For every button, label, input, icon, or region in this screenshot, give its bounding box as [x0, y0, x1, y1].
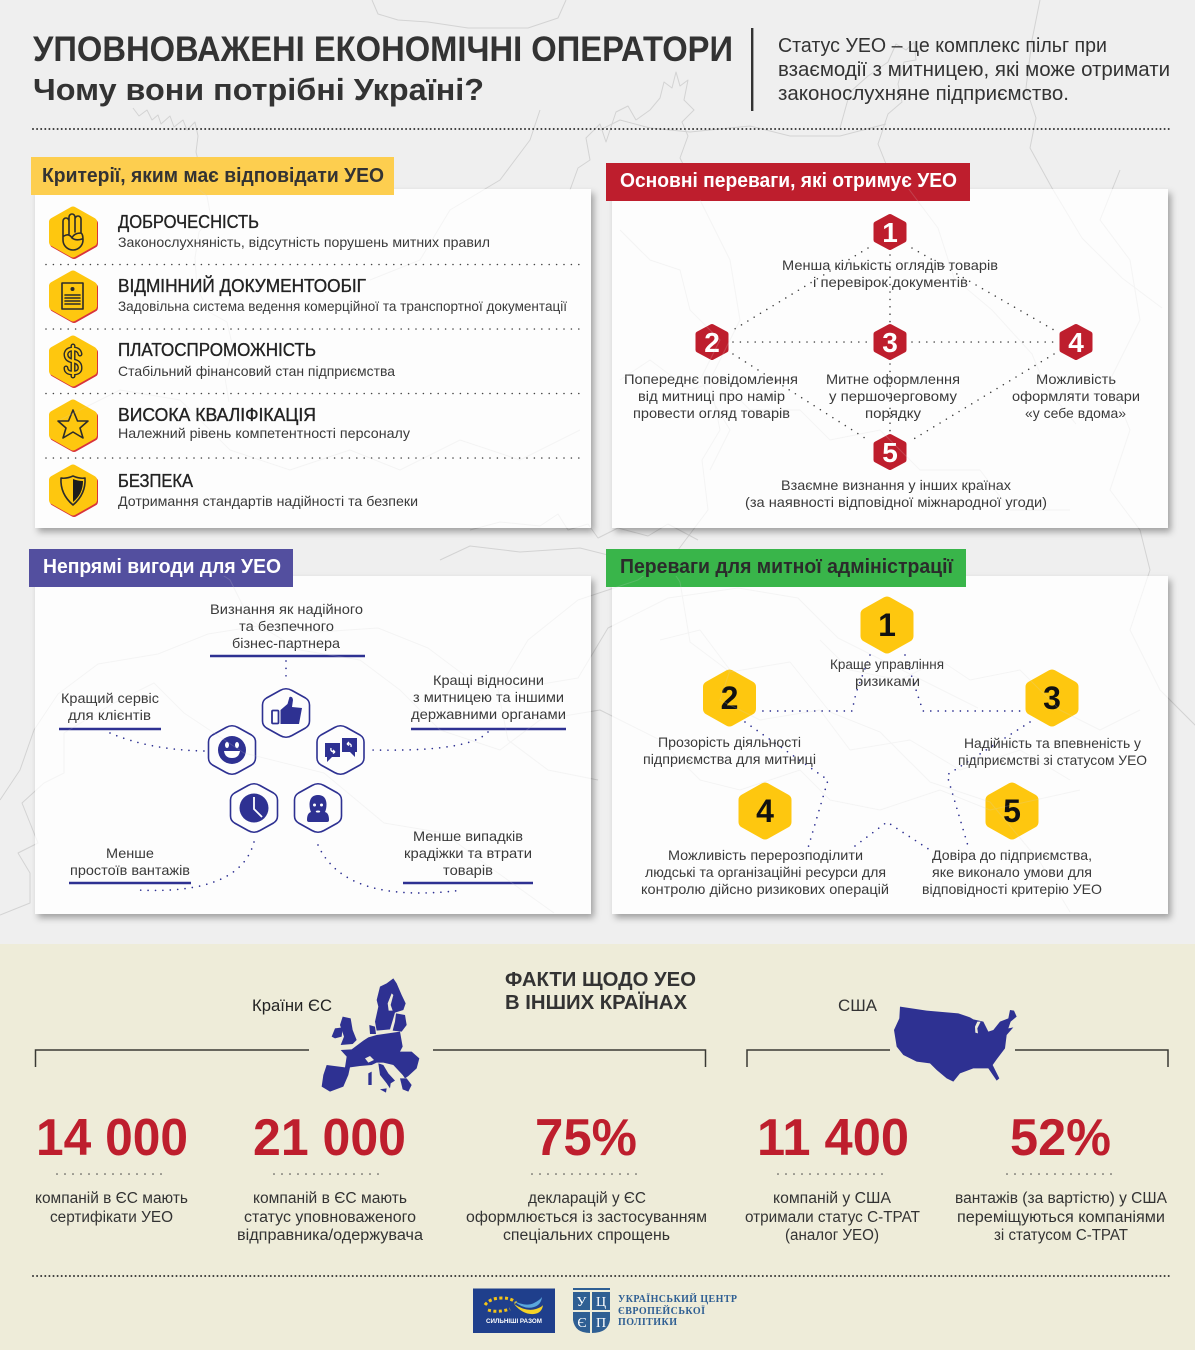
customs benefit 4 [641, 788, 889, 897]
benefit 1: Менша кількість оглядів товарів [782, 257, 998, 273]
benefit 3: Митне оформлення [826, 371, 960, 387]
criterion 4 text: ВИСОКА КВАЛІФІКАЦІЯ [118, 405, 316, 425]
intro text: законослухняне підприємство. [778, 83, 1069, 105]
stat: 52%: переміщуються компаніями [957, 1209, 1165, 1226]
benefit 4: 4 [1068, 327, 1084, 358]
customs benefit 2 [643, 676, 816, 767]
criterion 3 text [118, 340, 395, 379]
criterion 4 text [118, 405, 410, 441]
criterion 2 text: Задовільна система ведення комерційної та транспортної документації [118, 298, 567, 314]
customs benefit 1: ризиками [855, 673, 920, 689]
benefit 4: Можливість [1036, 371, 1116, 387]
divider line [751, 28, 753, 111]
title: УПОВНОВАЖЕНІ ЕКОНОМІЧНІ ОПЕРАТОРИ [33, 30, 733, 69]
benefit 2: провести огляд товарів [633, 405, 790, 421]
criterion 4 text: Належний рівень компетентності персоналу [118, 425, 410, 441]
map: EU [322, 978, 419, 1093]
benefit: relations with customs [411, 672, 566, 729]
icon: clock [230, 784, 278, 832]
icon: dollar [54, 340, 94, 384]
benefit 4: оформляти товари [1012, 388, 1140, 404]
benefit: client service: Кращий сервіс [61, 690, 159, 706]
customs benefit 5: 5 [1003, 793, 1021, 829]
benefit: less theft: Менше випадків [413, 828, 523, 844]
benefit 5: Взаємне визнання у інших країнах [781, 477, 1011, 493]
icon: star [54, 404, 94, 448]
logo: UCEP shield: Є [577, 1316, 587, 1331]
stat: 14 000: 14 000 [36, 1109, 188, 1167]
customs benefit 2: Прозорість діяльності [658, 734, 801, 750]
logo text: UCEP: ЄВРОПЕЙСЬКОЇ [618, 1304, 705, 1317]
stat: 75%: декларацій у ЄС [528, 1190, 646, 1207]
criterion 3 text: ПЛАТОСПРОМОЖНІСТЬ [118, 340, 316, 360]
panel: indirect benefits [29, 549, 591, 914]
benefit: client service [59, 690, 161, 729]
logo: Stronger Together [473, 1288, 555, 1333]
title: Чому вони потрібні Україні? [33, 72, 484, 107]
benefit 5: 5 [882, 437, 898, 468]
criterion 3 text: Стабільний фінансовий стан підприємства [118, 363, 395, 379]
benefit 3: у першочерговому [829, 388, 957, 404]
label: USA: США [838, 996, 878, 1015]
stat: 52% [955, 1109, 1168, 1244]
benefit: less downtime: простоїв вантажів [70, 862, 190, 878]
benefit: less theft: товарів [443, 862, 493, 878]
icon: thumbs up [262, 689, 310, 737]
background map lines [0, 0, 1195, 915]
benefit: client service: для клієнтів [68, 707, 151, 723]
benefit 2: Попереднє повідомлення [624, 371, 798, 387]
customs benefit 3: 3 [1043, 680, 1061, 716]
logo: UCEP shield: Ц [596, 1295, 606, 1310]
heading: criteria: Критерії, яким має відповідати УЕО [42, 165, 384, 187]
customs benefit 5: Довіра до підприємства, [932, 847, 1092, 863]
stat: 52%: 52% [1010, 1109, 1111, 1167]
benefit: less theft: крадіжки та втрати [404, 845, 532, 861]
icon: chat bubbles [317, 726, 364, 774]
panel: main benefits [606, 163, 1168, 528]
criterion 2 text: ВІДМІННИЙ ДОКУМЕНТООБІГ [118, 275, 366, 296]
facts title: ФАКТИ ЩОДО УЕО [505, 969, 696, 991]
curved dotted connectors [110, 661, 488, 893]
customs benefit 3: Надійність та впевненість у [964, 735, 1141, 751]
stat: 21 000: компаній в ЄС мають [253, 1190, 407, 1207]
customs benefit 4: контролю дійсно ризикових операцій [641, 881, 889, 897]
stat: 11 400: компаній у США [773, 1190, 892, 1207]
benefit 5 [745, 436, 1047, 510]
benefit 3: порядку [865, 405, 921, 421]
map: USA [894, 1007, 1017, 1082]
stat: 11 400: 11 400 [757, 1109, 909, 1167]
customs benefit 4: 4 [756, 793, 774, 829]
stat: 52%: зі статусом C-TPAT [994, 1227, 1129, 1244]
customs benefit 3: підприємстві зі статусом УЕО [958, 752, 1147, 768]
heading: main benefits: Основні переваги, які отримує УЕО [620, 170, 957, 192]
icon: balaclava [294, 784, 342, 832]
stat: 75%: спеціальних спрощень [503, 1227, 670, 1244]
benefit 3 [826, 326, 960, 421]
benefit: relations with customs: Кращі відносини [433, 672, 544, 688]
stat: 21 000: 21 000 [253, 1109, 406, 1167]
logo: UCEP shield [573, 1288, 610, 1333]
diamond dotted connectors [733, 248, 1056, 440]
customs benefit 1: 1 [878, 607, 896, 643]
benefit: reliable partner: Визнання як надійного [210, 601, 363, 617]
customs benefit 5: відповідності критерію УЕО [922, 881, 1102, 897]
panel: criteria [31, 157, 591, 528]
benefit 1 [782, 216, 998, 290]
criterion 1 text: Законослухняність, відсутність порушень митних правил [118, 234, 490, 250]
benefit: relations with customs: з митницею та іншими [413, 689, 564, 705]
heading: criteria [31, 157, 394, 195]
stat: 11 400: (аналог УЕО) [785, 1227, 879, 1244]
stat: 52%: вантажів (за вартістю) у США [955, 1190, 1168, 1207]
benefit 1: 1 [882, 217, 898, 248]
logo text: UCEP: УКРАЇНСЬКИЙ ЦЕНТР [618, 1292, 737, 1305]
stat: 14 000: компаній в ЄС мають [35, 1190, 188, 1207]
benefit 1: і перевірок документів [813, 274, 968, 290]
bracket: EU [36, 1050, 706, 1067]
heading: main benefits [606, 163, 970, 201]
customs benefit 3 [958, 676, 1147, 768]
stat: 14 000 [35, 1109, 188, 1226]
benefit 5: (за наявності відповідної міжнародної угоди) [745, 494, 1047, 510]
criterion 5 text [118, 471, 418, 509]
heading: indirect benefits: Непрямі вигоди для УЕО [43, 556, 281, 578]
benefit: reliable partner: бізнес-партнера [232, 635, 340, 651]
benefit 4 [1012, 326, 1140, 421]
stat: 11 400: отримали статус C-TPAT [745, 1209, 921, 1226]
customs benefit 5: яке виконало умови для [932, 864, 1092, 880]
benefit: less downtime: Менше [106, 845, 154, 861]
title [33, 30, 733, 107]
heading: indirect benefits [29, 549, 293, 587]
intro text [778, 35, 1170, 105]
criterion 5 text: Дотримання стандартів надійності та безпеки [118, 493, 418, 509]
benefit: reliable partner [210, 601, 365, 656]
logo text: UCEP [618, 1292, 737, 1328]
criterion 1 text: ДОБРОЧЕСНІСТЬ [118, 212, 259, 232]
icon: shield [54, 469, 94, 512]
bracket: USA [747, 1050, 1168, 1067]
facts title: В ІНШИХ КРАЇНАХ [505, 991, 688, 1014]
facts title [505, 969, 696, 1014]
logo: UCEP shield: П [596, 1316, 606, 1331]
customs benefit 5 [922, 788, 1102, 897]
panel: customs administration benefits [606, 549, 1168, 914]
customs benefit 2: 2 [721, 680, 738, 716]
icon: hand [54, 211, 94, 254]
stat: 75%: 75% [535, 1109, 637, 1167]
logo: UCEP shield: У [577, 1295, 587, 1310]
faint map over panels [35, 189, 1168, 913]
intro text: Статус УЕО – це комплекс пільг при [778, 35, 1107, 57]
benefit: reliable partner: та безпечного [239, 618, 334, 634]
customs benefit 4: Можливість перерозподілити [668, 847, 863, 863]
benefit: less downtime [69, 845, 191, 883]
logo text: UCEP: ПОЛІТИКИ [618, 1317, 677, 1328]
criterion 1 text [118, 212, 490, 250]
stat: 21 000 [237, 1109, 423, 1244]
stat: 75% [466, 1109, 707, 1244]
label: EU: Країни ЄС [252, 996, 332, 1015]
benefit 2: 2 [704, 327, 720, 358]
benefit: less theft [403, 828, 533, 883]
heading: customs benefits: Переваги для митної адміністрації [620, 556, 953, 578]
benefit 2: від митниці про намір [638, 388, 785, 404]
benefit 3: 3 [882, 327, 898, 358]
icon: document [54, 275, 94, 318]
stat: 14 000: сертифікати УЕО [50, 1209, 173, 1226]
customs benefit 1: Краще управління [830, 656, 944, 672]
stat: 11 400 [745, 1109, 921, 1244]
stat: 21 000: статус уповноваженого [244, 1209, 416, 1226]
customs benefit 2: підприємства для митниці [643, 751, 816, 767]
panel: facts [0, 944, 1195, 1350]
customs benefit 1 [830, 602, 944, 689]
heading: customs benefits [606, 549, 966, 587]
icon: smiley [208, 726, 256, 774]
benefit: relations with customs: державними органами [411, 706, 566, 722]
intro text: взаємодії з митницею, які може отримати [778, 59, 1170, 81]
stat: 75%: оформлюється із застосуванням [466, 1209, 707, 1226]
criterion 5 text: БЕЗПЕКА [118, 471, 193, 491]
benefit 2 [624, 326, 798, 421]
customs benefit 4: людські та організаційні ресурси для [645, 864, 886, 880]
logo: Stronger Together: СИЛЬНІШІ РАЗОМ [486, 1318, 542, 1325]
dotted connectors [745, 655, 1030, 850]
criterion 2 text [118, 275, 567, 314]
stat: 21 000: відправника/одержувача [237, 1227, 423, 1244]
benefit 4: «у себе вдома» [1025, 405, 1126, 421]
